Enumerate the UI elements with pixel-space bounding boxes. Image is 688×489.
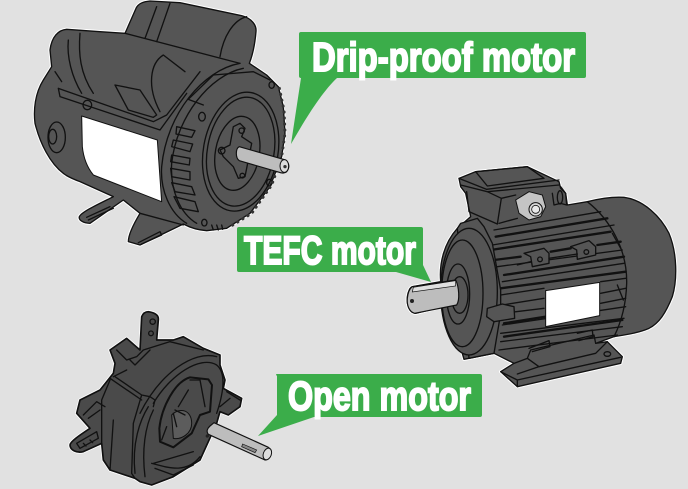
callout: Drip-proof motor xyxy=(291,32,586,144)
base feet xyxy=(501,335,621,387)
cable gland xyxy=(516,192,546,220)
callout: Drip-proof motor: Drip-proof motor xyxy=(312,34,575,80)
callout: TEFC motor: TEFC motor xyxy=(244,229,416,273)
end bell rings xyxy=(134,356,223,477)
drip-proof motor xyxy=(34,1,289,245)
callout: Open motor xyxy=(258,373,482,436)
rotor opening xyxy=(159,377,212,447)
capacitor housing details xyxy=(48,3,247,153)
front flange xyxy=(441,218,515,358)
shaft xyxy=(206,423,273,461)
stator frame lines xyxy=(77,319,240,478)
cooling teeth xyxy=(230,88,285,227)
concentric face rings xyxy=(193,86,288,217)
shaft xyxy=(236,147,289,173)
shaft xyxy=(407,280,459,313)
callout: TEFC motor xyxy=(237,227,431,282)
cooling fins xyxy=(491,212,626,350)
nameplate window xyxy=(546,282,600,327)
nameplate window xyxy=(82,116,162,202)
open motor xyxy=(70,312,273,485)
TEFC motor xyxy=(407,167,676,387)
callout: Open motor: Open motor xyxy=(288,373,471,419)
fan cover xyxy=(587,202,627,337)
terminal box xyxy=(459,167,567,224)
vented end bell xyxy=(161,63,274,230)
mounting feet xyxy=(87,207,183,244)
mounting lugs xyxy=(517,241,596,352)
